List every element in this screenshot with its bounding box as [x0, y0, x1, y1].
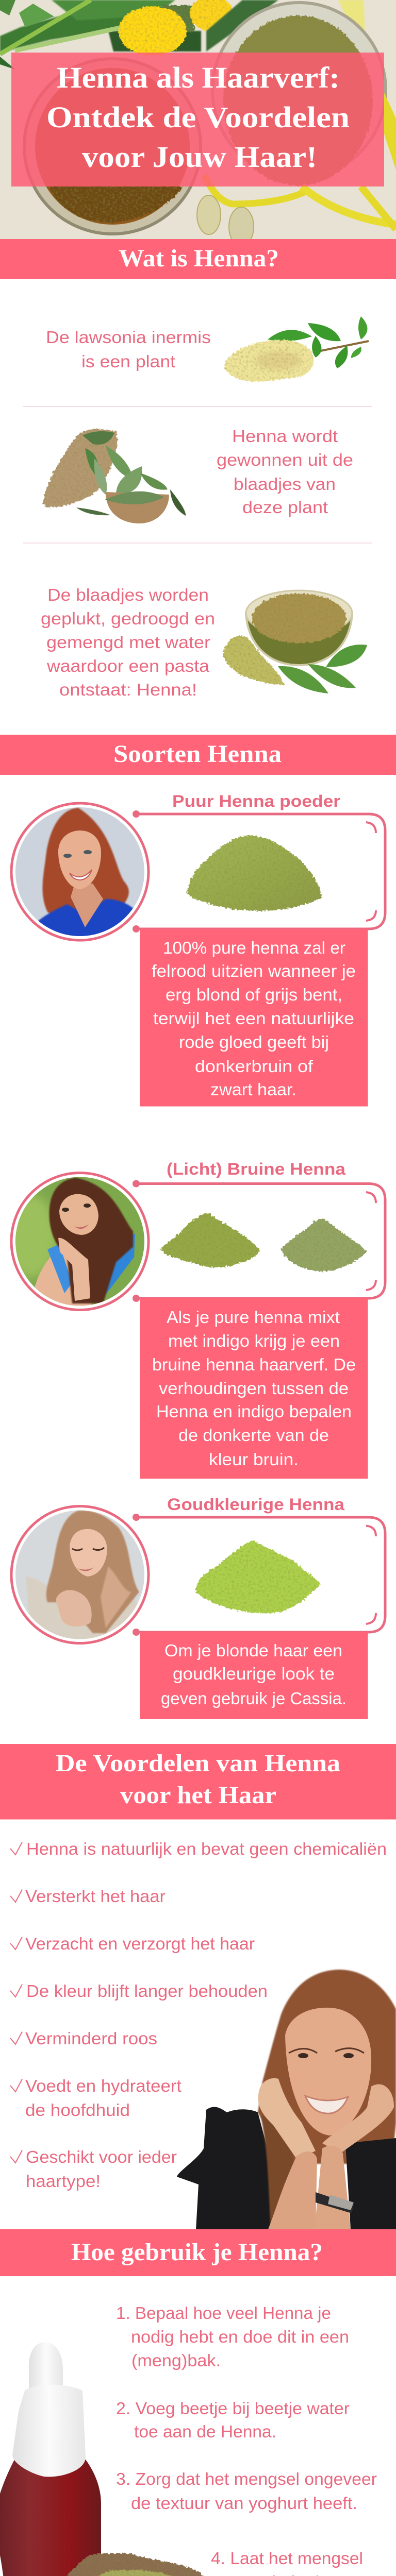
image: burlap sack with leaves	[43, 429, 186, 523]
benefits list: Verminderd roos	[25, 2029, 157, 2048]
frame with bullets	[133, 810, 385, 933]
description box: felrood uitzien wanneer je	[152, 961, 356, 980]
benefits list: haartype!	[26, 2172, 101, 2191]
description box: terwijl het een natuurlijke	[153, 1009, 354, 1028]
title panel	[11, 53, 384, 187]
benefits list: Henna is natuurlijk en bevat geen chemicaliën	[26, 1839, 387, 1858]
image: red dropper bottle with henna pot and nuts	[0, 2342, 210, 2576]
text: paste: gemengd met water	[46, 633, 210, 652]
benefits list: Verzacht en verzorgt het haar	[25, 1934, 255, 1953]
portrait: blonde woman	[10, 1506, 150, 1646]
image: flowering henna branch	[224, 316, 369, 382]
heading bar: De Voordelen van Henna voor het Haar: voor het Haar	[120, 1782, 276, 1809]
text: lawsonia plant: De lawsonia inermis	[46, 328, 211, 347]
text: paste: geplukt, gedroogd en	[41, 609, 215, 628]
title text: voor Jouw Haar!	[82, 140, 317, 174]
title text: Henna als Haarverf:	[57, 61, 340, 94]
description box: Als je pure henna mixt	[167, 1308, 340, 1327]
description box: bruine henna haarverf. De	[152, 1355, 356, 1374]
text: leaves: deze plant	[242, 498, 328, 517]
text: lawsonia plant: is een plant	[81, 352, 175, 371]
step 3	[116, 2469, 377, 2513]
description box: erg blond of grijs bent,	[166, 985, 342, 1004]
benefits list: Voedt en hydrateert	[25, 2076, 182, 2095]
step 2	[116, 2399, 350, 2441]
description box: Henna en indigo bepalen	[156, 1402, 352, 1421]
description box: Om je blonde haar een	[164, 1641, 342, 1660]
title text	[46, 61, 350, 174]
image: bowl of henna paste	[223, 590, 367, 693]
steps 1 to 4	[116, 2303, 377, 2576]
text: leaves: gewonnen uit de	[217, 450, 353, 469]
portrait: brunette woman	[5, 1173, 150, 1314]
heading bar: Hoe gebruik je Henna?: Hoe gebruik je Henna?	[71, 2239, 323, 2266]
step 1: 1. Bepaal hoe veel Henna je	[116, 2303, 331, 2323]
step 4: 4. Laat het mengsel	[211, 2549, 363, 2568]
step 1: nodig hebt en doe dit in een	[131, 2327, 349, 2346]
step 2: toe aan de Henna.	[134, 2422, 276, 2441]
description box: geven gebruik je Cassia.	[161, 1689, 346, 1708]
image: two henna powder piles	[160, 1213, 367, 1272]
description box: goudkleurige look te	[173, 1664, 335, 1683]
frame with bullets	[133, 1514, 385, 1636]
heading bar: De Voordelen van Henna voor het Haar	[0, 1744, 396, 1820]
heading bar: Hoe gebruik je Henna?	[0, 2229, 396, 2276]
text: paste: ontstaat: Henna!	[59, 680, 197, 699]
text: leaves: Henna wordt	[232, 427, 338, 446]
benefits list: de hoofdhuid	[25, 2100, 130, 2120]
step 3: 3. Zorg dat het mengsel ongeveer	[116, 2469, 377, 2488]
step 1: (meng)bak.	[131, 2351, 221, 2370]
benefits list: De kleur blijft langer behouden	[26, 1981, 268, 2001]
text: leaves	[217, 427, 353, 517]
heading bar: De Voordelen van Henna voor het Haar: De Voordelen van Henna	[56, 1750, 340, 1777]
heading bar: Wat is Henna?: Wat is Henna?	[119, 245, 279, 272]
heading bar: Soorten Henna: Soorten Henna	[113, 740, 282, 768]
description box: kleur bruin.	[209, 1450, 299, 1469]
description box	[140, 929, 368, 1107]
text: paste	[41, 585, 215, 699]
card title: Puur Henna poeder	[172, 792, 340, 810]
image: golden cassia powder pile	[196, 1540, 321, 1613]
benefits list: Versterkt het haar	[25, 1887, 166, 1906]
description box: donkerbruin of	[195, 1057, 314, 1076]
hero photo: henna bowls with dandelions and ribbon	[0, 0, 396, 246]
portrait: red-haired woman	[10, 803, 150, 943]
photo: smiling woman with hands on chin	[177, 1970, 396, 2229]
card title: (Licht) Bruine Henna	[167, 1160, 345, 1178]
card title: Goudkleurige Henna	[167, 1495, 344, 1514]
card: Puur Henna poeder	[10, 792, 385, 1107]
description box: met indigo krijg je een	[168, 1331, 340, 1350]
heading bar: Soorten Henna	[0, 735, 396, 775]
text: leaves: blaadjes van	[234, 474, 336, 494]
text: paste: waardoor een pasta	[46, 656, 210, 675]
card: Goudkleurige Henna	[10, 1495, 385, 1719]
step 2: 2. Voeg beetje bij beetje water	[116, 2399, 350, 2418]
step 3: de textuur van yoghurt heeft.	[131, 2494, 357, 2513]
benefits list	[10, 1839, 387, 2191]
heading bar: Wat is Henna?	[0, 239, 396, 279]
description box	[140, 1298, 368, 1479]
title text: Ontdek de Voordelen	[46, 100, 350, 134]
card: (Licht) Bruine Henna	[5, 1160, 385, 1479]
frame with bullets	[133, 1180, 385, 1302]
description box	[140, 1632, 368, 1719]
description box: verhoudingen tussen de	[159, 1379, 349, 1398]
text: lawsonia plant	[46, 328, 211, 371]
text: paste: De blaadjes worden	[47, 585, 209, 604]
image: henna powder pile	[187, 835, 322, 911]
description box: zwart haar.	[210, 1080, 296, 1099]
description box: rode gloed geeft bij	[179, 1032, 329, 1052]
description box: 100% pure henna zal er	[163, 938, 345, 957]
step 4	[211, 2549, 377, 2576]
step 1	[116, 2303, 349, 2370]
benefits list: Geschikt voor ieder	[26, 2147, 177, 2166]
description box: de donkerte van de	[178, 1426, 329, 1445]
